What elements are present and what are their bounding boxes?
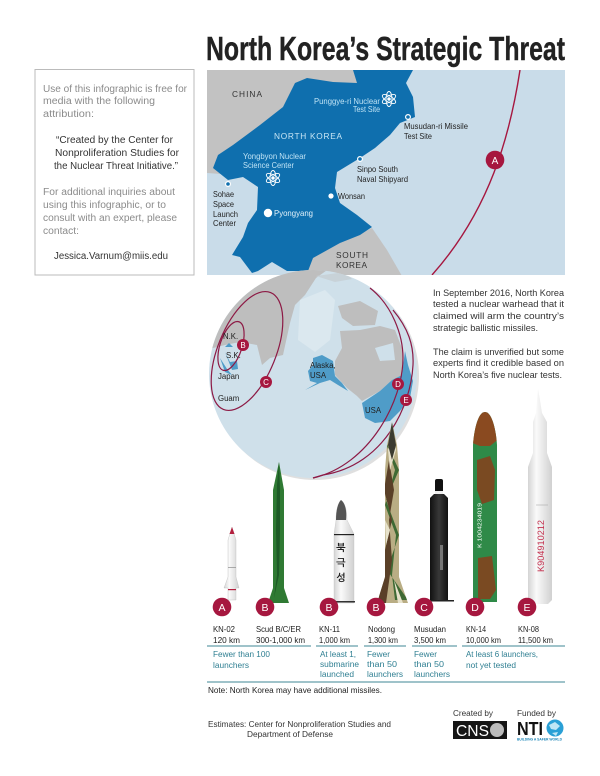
icon: atom Punggye-ri — [381, 92, 397, 106]
missile names and ranges: Musudan — [414, 624, 446, 634]
logo: NTI — [517, 708, 564, 742]
missile: KN-08: K904910212 — [536, 520, 546, 572]
globe badges: D — [395, 380, 401, 389]
missile: Nodong — [378, 422, 408, 603]
launcher counts: Fewer — [414, 649, 437, 659]
text block: warhead claim: claimed will arm the country’s — [433, 310, 564, 321]
top polar land — [316, 273, 352, 282]
globe labels: Alaska, — [310, 361, 336, 370]
text block: warhead claim: The claim is unverified but some — [433, 346, 564, 357]
logo: NTI: BUILDING A SAFER WORLD — [517, 738, 562, 742]
estimates source — [208, 719, 391, 739]
globe badges: E — [403, 396, 409, 405]
missile range badges: E — [523, 602, 531, 614]
USA — [362, 351, 413, 423]
missile range badges: B — [261, 602, 269, 614]
missile: KN-02 — [224, 527, 239, 600]
logo: NTI: Funded by — [517, 708, 557, 718]
map labels: Pyongyang — [274, 208, 313, 218]
missile: Scud — [268, 462, 289, 603]
missile names and ranges: 10,000 km — [466, 635, 501, 645]
map labels: SOUTH — [336, 250, 368, 260]
map labels: KOREA — [336, 260, 367, 270]
launcher counts: Fewer than 100 — [213, 649, 270, 659]
map labels: Musudan-ri Missile — [404, 121, 468, 131]
missile names and ranges: KN-08 — [518, 624, 539, 634]
North America landmass — [335, 326, 403, 401]
launcher counts: than 50 — [367, 659, 397, 669]
launcher counts: launchers — [213, 660, 250, 670]
trajectory arc A — [432, 70, 520, 275]
panel: attribution box: consult with an expert, please — [43, 213, 177, 224]
globe labels: USA — [310, 371, 327, 380]
launcher counts: launched — [320, 669, 354, 679]
missile range badges: B — [372, 602, 380, 614]
missile: KN-14 — [473, 412, 497, 602]
Asia landmass — [212, 270, 326, 365]
missile names and ranges: KN-11 — [319, 624, 340, 634]
map labels — [213, 89, 468, 270]
missile: KN-11: 극 — [336, 558, 346, 569]
launcher counts: Fewer — [367, 649, 390, 659]
missile: Musudan — [430, 479, 454, 602]
arctic ice — [298, 290, 335, 352]
missile names and ranges: Scud B/C/ER — [256, 624, 301, 634]
map labels: CHINA — [232, 89, 262, 99]
map labels: Wonsan — [338, 191, 365, 201]
Hudson Bay — [375, 343, 395, 361]
missile names and ranges: 3,500 km — [414, 635, 446, 645]
estimates source: Department of Defense — [247, 729, 333, 739]
Korea and Japan highlights — [220, 343, 238, 375]
icon: atom Yongbyon — [265, 170, 281, 186]
missile range badges: A — [218, 602, 226, 614]
missile range badges: B — [325, 602, 333, 614]
missile: KN-11: 성 — [336, 572, 346, 584]
missile names and ranges: KN-14 — [466, 624, 486, 634]
missile: KN-08 — [528, 389, 552, 604]
text block: warhead claim — [433, 287, 565, 380]
logo: NTI: NTI — [517, 719, 543, 739]
text block: warhead claim: experts find it credible based on — [433, 357, 564, 368]
globe labels: Japan — [218, 372, 239, 381]
launcher counts: At least 1, — [320, 649, 356, 659]
panel: attribution box: For additional inquiries about — [43, 187, 175, 198]
map labels: Center — [213, 218, 236, 228]
missile names and ranges: Nodong — [368, 624, 395, 634]
map labels: Yongbyon Nuclear — [243, 151, 306, 161]
panel: attribution box: media with the following — [43, 96, 155, 107]
globe labels: N.K. — [223, 332, 238, 341]
Alaska — [305, 355, 348, 391]
South Korea landmass — [308, 228, 402, 275]
missile names and ranges — [213, 624, 553, 645]
globe badges: B — [240, 341, 246, 350]
text block: warhead claim: In September 2016, North Korea — [433, 287, 565, 298]
map labels: Test Site — [404, 131, 432, 141]
map labels: Space — [213, 199, 234, 209]
globe labels: Guam — [218, 394, 239, 403]
North Korea landmass — [213, 70, 415, 273]
missile names and ranges: 300-1,000 km — [256, 635, 305, 645]
missile names and ranges: 120 km — [213, 635, 240, 645]
panel: attribution box: the Nuclear Threat Initiative.” — [54, 161, 178, 172]
China landmass — [207, 70, 360, 175]
Baffin and arctic islands — [338, 301, 378, 326]
missile: KN-14: K 1004234019 — [478, 503, 484, 548]
logo: CNS — [453, 708, 507, 740]
text block: warhead claim: strategic ballistic missiles. — [433, 322, 538, 333]
panel: Korean peninsula map — [207, 70, 565, 276]
launcher counts: submarine — [320, 659, 359, 669]
globe labels: S.K. — [226, 351, 241, 360]
badge A — [486, 151, 504, 169]
panel: attribution box: using this infographic, or to — [43, 200, 166, 211]
panel: globe range map — [197, 268, 419, 480]
map labels: Science Center — [243, 160, 294, 170]
panel: attribution box: Jessica.Varnum@miis.edu — [54, 251, 168, 262]
text block: warhead claim: North Korea’s five nuclear tests. — [433, 369, 562, 380]
launcher counts: not yet tested — [466, 660, 516, 670]
missile range badges: D — [471, 602, 479, 614]
globe badges: C — [263, 378, 269, 387]
panel: attribution box: Use of this infographic is free for — [43, 84, 188, 95]
note: Note: North Korea may have additional missiles. — [208, 685, 382, 695]
panel: attribution box: attribution: — [43, 109, 94, 120]
badge A: A — [492, 156, 499, 167]
missile names and ranges: 1,300 km — [368, 635, 398, 645]
missile: KN-11: 북 — [336, 542, 346, 554]
panel: attribution box: “Created by the Center for — [56, 135, 174, 146]
globe labels — [218, 332, 382, 415]
globe badges — [237, 339, 412, 406]
panel: attribution box — [35, 70, 194, 275]
missile: KN-11 — [333, 500, 355, 603]
map labels: NORTH KOREA — [274, 131, 342, 141]
missile range badges: C — [420, 602, 428, 614]
logo: CNS: CNS — [456, 723, 489, 740]
map site markers — [226, 115, 410, 217]
text block: warhead claim: tested a nuclear warhead that it — [433, 298, 564, 309]
launcher counts: launchers — [414, 669, 451, 679]
map labels: Sohae — [213, 189, 234, 199]
range rings — [197, 282, 413, 478]
launcher counts: than 50 — [414, 659, 444, 669]
logo: CNS: Created by — [453, 708, 494, 718]
missile names and ranges: 11,500 km — [518, 635, 553, 645]
globe labels: USA — [365, 406, 382, 415]
launcher counts — [213, 649, 538, 679]
map labels: Sinpo South — [357, 164, 398, 174]
launcher counts: launchers — [367, 669, 404, 679]
launcher counts: At least 6 launchers, — [466, 649, 538, 659]
missile names and ranges: 1,000 km — [319, 635, 350, 645]
map labels: Launch — [213, 209, 238, 219]
map labels: Test Site — [353, 104, 380, 114]
panel: attribution box: Nonproliferation Studies for — [55, 148, 180, 159]
missile range badges — [213, 598, 536, 616]
estimates source: Estimates: Center for Nonproliferation Studies and — [208, 719, 391, 729]
map labels: Punggye-ri Nuclear — [314, 96, 380, 106]
missile names and ranges: KN-02 — [213, 624, 235, 634]
panel: attribution box: contact: — [43, 226, 79, 237]
map labels: Naval Shipyard — [357, 174, 408, 184]
